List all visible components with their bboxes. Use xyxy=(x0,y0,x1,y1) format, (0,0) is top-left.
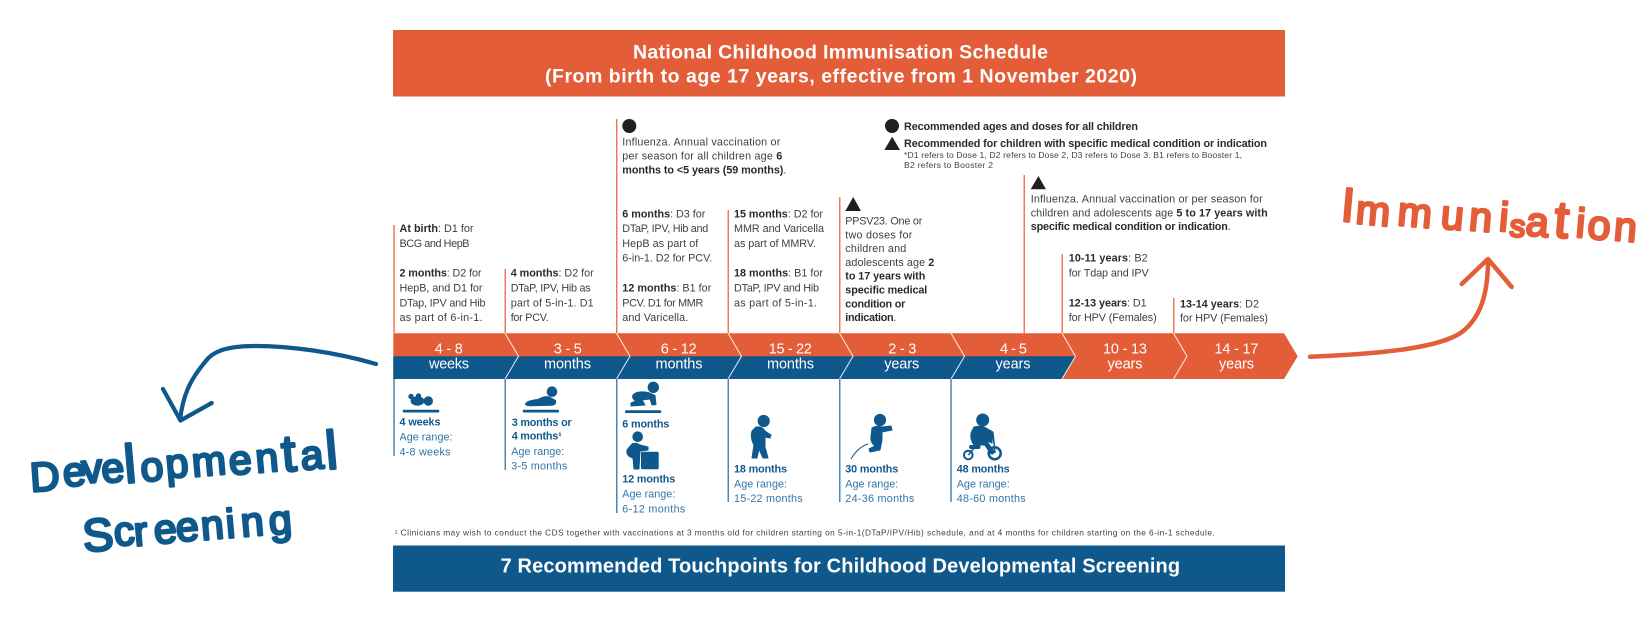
immunisation column: PPSV23: adolescents age 2 xyxy=(845,257,934,269)
handwritten label: Developmental: l xyxy=(323,420,340,481)
screening column: 3 or 4 months: 3-5 months xyxy=(511,460,568,472)
screening column: 18 months: 15-22 months xyxy=(734,493,803,505)
screening column: 6 and 12 months: Age range: xyxy=(622,489,675,501)
handwritten label: Immunisation: ion xyxy=(1574,200,1639,251)
screening column: 4 weeks: Age range: xyxy=(400,432,452,444)
immunisation column: PPSV23: to 17 years with xyxy=(845,271,925,283)
timeline chevron band: years xyxy=(1219,356,1254,372)
screening column: 18 months: Age range: xyxy=(734,479,787,491)
timeline chevron band: 4 - 8 xyxy=(435,341,463,357)
immunisation column: influenza, 6 and 12 months: HepB as part of xyxy=(622,238,699,250)
immunisation column: 15 and 18 months: MMR and Varicella xyxy=(734,223,824,235)
immunisation column: 10-13 years: 10-11 years: B2 xyxy=(1069,253,1148,265)
screening column: 30 months: Age range: xyxy=(845,479,898,491)
immunisation column: 13-14 years: 13-14 years: D2 xyxy=(1180,298,1259,310)
handwritten label: Developmental: l xyxy=(121,434,139,495)
timeline chevron band: 10 - 13 xyxy=(1103,341,1147,357)
screening column: 6 and 12 months: 6 months xyxy=(622,418,669,430)
screening column: 30 months xyxy=(839,379,915,505)
immunisation column: 10-13 years: for HPV (Females) xyxy=(1069,312,1157,324)
immunisation column: PPSV23 xyxy=(839,197,934,333)
handwritten label: Screening: S xyxy=(80,507,115,562)
immunisation column: PPSV23: indication. xyxy=(845,312,896,324)
timeline chevron band: weeks xyxy=(428,356,469,372)
immunisation column: 13-14 years xyxy=(1173,298,1268,333)
screening column: 48 months xyxy=(950,379,1026,505)
timeline chevron band: months xyxy=(767,356,814,372)
timeline chevron band: years xyxy=(996,356,1030,372)
handwritten label: Immunisation: t xyxy=(1552,191,1572,250)
legend: Recommended ages and doses for all children xyxy=(904,121,1138,133)
immunisation column: influenza, 6 and 12 months: Influenza. Annual vaccination or xyxy=(622,137,781,149)
screening column: 3 or 4 months: 4 months¹ xyxy=(512,431,562,443)
screening column: 6 and 12 months: 6-12 months xyxy=(622,503,686,515)
handwritten label: Immunisation: s xyxy=(1508,208,1527,244)
timeline chevron band: 3 - 5 xyxy=(554,341,582,357)
immunisation column: influenza, 6 and 12 months: 6-in-1. D2 for PCV. xyxy=(622,253,712,265)
immunisation column: 4 months: for PCV. xyxy=(511,312,549,324)
screening column: 48 months: Age range: xyxy=(957,479,1010,491)
title banner xyxy=(393,30,1285,96)
screening column: 4 weeks: 4 weeks xyxy=(400,417,440,429)
timeline chevron band: years xyxy=(1108,356,1142,372)
screening column: 3 or 4 months: 3 months or xyxy=(512,417,572,429)
arrow: developmental screening xyxy=(163,346,376,420)
screening column: 4 weeks: 4-8 weeks xyxy=(400,446,451,458)
title banner: (From birth to age 17 years, effective from 1 November 2020) xyxy=(545,65,1137,87)
screening column: 30 months: 24-36 months xyxy=(845,493,915,505)
screening banner: 7 Recommended Touchpoints for Childhood Developmental Screening xyxy=(501,556,1180,578)
immunisation column: influenza for specific conditions: children and adolescents age 5 to 17 years with xyxy=(1031,207,1268,219)
handwritten label: Developmental: D xyxy=(28,453,61,501)
immunisation column: 15 and 18 months: as part of 5-in-1. xyxy=(734,297,817,309)
handwritten label: Immunisation: I xyxy=(1339,179,1357,233)
immunisation column: 4 months xyxy=(504,268,594,333)
screening column: 48 months: 48-60 months xyxy=(957,493,1026,505)
timeline chevron band: years xyxy=(884,356,919,372)
immunisation column: 10-13 years xyxy=(1062,253,1157,333)
immunisation column: at birth and 2 months: as part of 6-in-1. xyxy=(400,312,482,324)
immunisation column: PPSV23: condition or xyxy=(845,298,906,310)
handwritten label: Immunisation: mmuni xyxy=(1354,186,1511,241)
immunisation column: influenza, 6 and 12 months: and Varicella. xyxy=(622,312,688,324)
immunisation column: 13-14 years: for HPV (Females) xyxy=(1180,312,1268,324)
immunisation column: 4 months: DTaP, IPV, Hib as xyxy=(511,283,591,295)
legend: Recommended for children with specific medical condition or indication xyxy=(904,138,1267,150)
timeline chevron band: months xyxy=(656,356,702,372)
handwritten label: Developmental: a xyxy=(298,431,325,479)
immunisation column: at birth and 2 months: DTap, IPV and Hib xyxy=(400,297,486,309)
timeline chevron band: months xyxy=(544,356,591,372)
immunisation column: 4 months: 4 months: D2 for xyxy=(511,268,594,280)
footnote: ¹ Clinicians may wish to conduct the CDS together with vaccinations at 3 months old for children starting on 5-in-1(DTaP/IPV/Hib) schedule, and at 4 months for children starting on the 6-in-1 schedule. xyxy=(395,528,1215,538)
timeline chevron band: 14 - 17 xyxy=(1214,341,1258,357)
handwritten label: Screening: creening xyxy=(112,496,294,555)
legend xyxy=(884,119,1267,170)
screening column: 18 months xyxy=(728,379,803,505)
immunisation column: influenza, 6 and 12 months xyxy=(616,119,786,333)
timeline chevron band xyxy=(393,333,1298,379)
immunisation column: PPSV23: children and xyxy=(845,243,906,255)
screening column: 30 months: 30 months xyxy=(845,463,898,475)
immunisation column: 10-13 years: 12-13 years: D1 xyxy=(1069,298,1147,310)
handwritten label: Developmental: opmen xyxy=(138,434,280,491)
immunisation column: at birth and 2 months: HepB, and D1 for xyxy=(400,283,483,295)
immunisation column: influenza, 6 and 12 months: 6 months: D3 for xyxy=(622,208,706,220)
immunisation column: 15 and 18 months: DTaP, IPV and Hib xyxy=(734,283,819,295)
immunisation column: PPSV23: specific medical xyxy=(845,285,927,297)
screening column: 4 weeks xyxy=(393,379,452,458)
screening column: 6 and 12 months xyxy=(616,379,686,515)
screening column: 18 months: 18 months xyxy=(734,463,787,475)
handwritten label: Immunisation: a xyxy=(1524,198,1551,246)
timeline chevron band: 15 - 22 xyxy=(769,341,812,357)
immunisation column: influenza, 6 and 12 months: months to <5 years (59 months). xyxy=(622,164,786,176)
immunisation column: at birth and 2 months: BCG and HepB xyxy=(400,238,470,250)
timeline chevron band: 6 - 12 xyxy=(661,341,697,357)
title banner: National Childhood Immunisation Schedule xyxy=(633,41,1048,63)
immunisation column: 15 and 18 months xyxy=(728,208,824,333)
legend: *D1 refers to Dose 1, D2 refers to Dose 2, D3 refers to Dose 3. B1 refers to Booster 1, xyxy=(904,150,1242,160)
immunisation column: influenza for specific conditions: specific medical condition or indication. xyxy=(1031,221,1231,233)
immunisation column: influenza, 6 and 12 months: PCV. D1 for MMR xyxy=(622,297,703,309)
screening column: 3 or 4 months xyxy=(504,379,572,472)
immunisation column: influenza for specific conditions xyxy=(1024,175,1268,333)
handwritten label: Developmental: t xyxy=(279,425,299,484)
screening column: 3 or 4 months: Age range: xyxy=(511,446,564,458)
immunisation column: 15 and 18 months: 15 months: D2 for xyxy=(734,208,823,220)
immunisation column: 10-13 years: for Tdap and IPV xyxy=(1069,268,1149,280)
timeline chevron band: 4 - 5 xyxy=(1000,341,1027,357)
immunisation column: 15 and 18 months: as part of MMRV. xyxy=(734,238,816,250)
immunisation column: influenza, 6 and 12 months: DTaP, IPV, Hib and xyxy=(622,223,708,235)
immunisation column: at birth and 2 months xyxy=(393,223,486,333)
legend: B2 refers to Booster 2 xyxy=(904,160,993,170)
screening banner xyxy=(393,546,1285,592)
immunisation column: influenza for specific conditions: Influenza. Annual vaccination or per season for xyxy=(1031,194,1263,206)
screening column: 48 months: 48 months xyxy=(957,463,1010,475)
immunisation column: influenza, 6 and 12 months: per season for all children age 6 xyxy=(622,151,782,163)
immunisation column: influenza, 6 and 12 months: 12 months: B1 for xyxy=(622,282,712,294)
timeline chevron band: 2 - 3 xyxy=(888,341,916,357)
immunisation column: 15 and 18 months: 18 months: B1 for xyxy=(734,268,823,280)
immunisation column: PPSV23: PPSV23. One or xyxy=(845,215,923,227)
arrow: immunisation xyxy=(1310,259,1512,357)
immunisation column: at birth and 2 months: 2 months: D2 for xyxy=(400,268,482,280)
immunisation column: at birth and 2 months: At birth: D1 for xyxy=(400,223,474,235)
screening column: 6 and 12 months: 12 months xyxy=(622,474,675,486)
immunisation column: PPSV23: two doses for xyxy=(845,229,913,241)
handwritten label: Developmental: eve xyxy=(61,444,126,496)
immunisation column: 4 months: part of 5-in-1. D1 xyxy=(511,297,594,309)
